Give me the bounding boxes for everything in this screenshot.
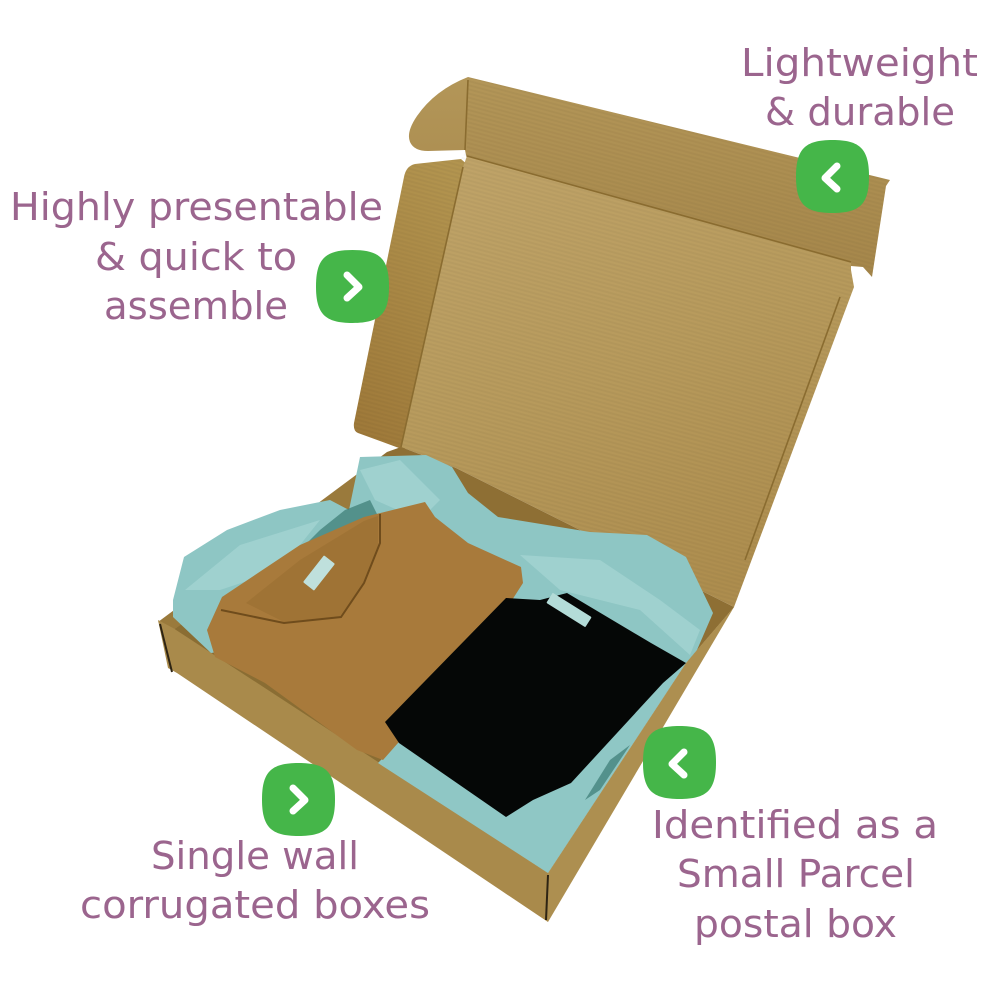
callout text: Identified as a xyxy=(652,803,938,847)
shirt neck label xyxy=(303,555,335,591)
callout: lightweight and durable: & durable xyxy=(765,90,955,134)
callout: highly presentable: & quick to xyxy=(95,235,297,279)
corrugation texture on lid panels xyxy=(354,77,890,607)
tissue highlights xyxy=(185,460,700,655)
callout: single wall xyxy=(80,763,430,927)
callout: small parcel: Small Parcel xyxy=(677,852,915,896)
icon: green right chevron button xyxy=(262,763,335,836)
shirt body xyxy=(207,502,523,760)
callout: single wall: corrugated boxes xyxy=(80,883,430,927)
black folded t-shirt xyxy=(385,593,686,817)
tissue lower sheet xyxy=(378,663,686,873)
box inner back wall xyxy=(360,447,734,663)
open box lid xyxy=(354,77,890,607)
icon: green right chevron button xyxy=(316,250,389,323)
callout: highly presentable: assemble xyxy=(104,284,288,328)
box dark edges xyxy=(160,624,548,920)
lid main panel xyxy=(401,156,854,607)
callout: small parcel: postal box xyxy=(694,902,897,946)
icon: green left chevron button xyxy=(643,726,716,799)
black shirt neck label xyxy=(546,593,592,627)
box base xyxy=(158,447,734,922)
box floor xyxy=(173,490,734,873)
black shirt body xyxy=(385,593,686,817)
shirt collar line xyxy=(221,514,380,623)
box front wall xyxy=(158,620,548,922)
tissue paper xyxy=(173,455,713,873)
lid left flap xyxy=(354,159,470,450)
tan folded t-shirt xyxy=(207,502,523,760)
shirt neck interior xyxy=(246,516,378,622)
callout: small parcel xyxy=(643,726,938,946)
tissue folds in shadow xyxy=(250,500,630,800)
box right wall xyxy=(548,607,734,922)
callout: lightweight and durable xyxy=(741,41,978,213)
callout text: Highly presentable xyxy=(10,185,383,229)
box left inner wall xyxy=(158,472,385,630)
callout: highly presentable xyxy=(10,185,389,328)
icon: green left chevron button xyxy=(796,140,869,213)
lid top flap xyxy=(409,77,890,277)
lid fold lines xyxy=(401,80,851,560)
tissue upper sheet xyxy=(173,455,713,663)
callout text: Single wall xyxy=(151,834,359,878)
callout text: Lightweight xyxy=(741,41,978,85)
